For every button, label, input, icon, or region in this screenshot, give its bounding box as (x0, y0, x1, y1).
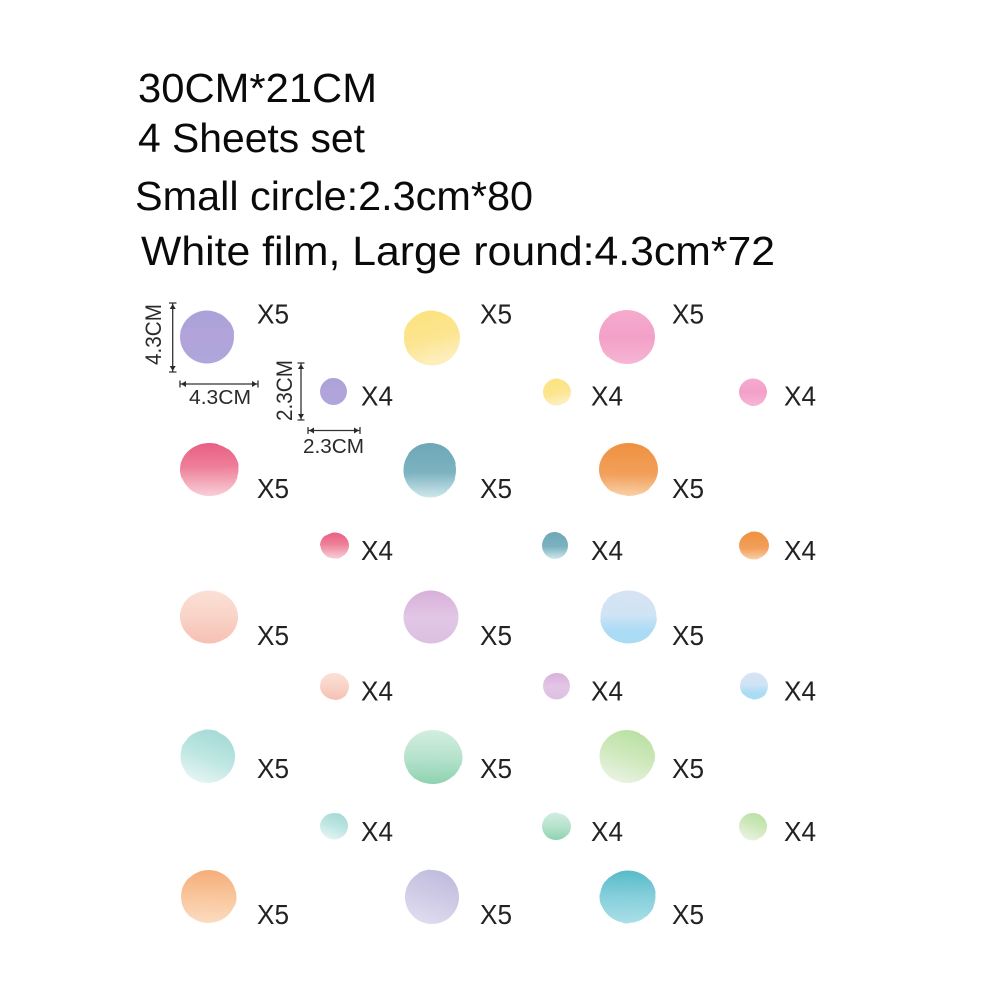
quantity labels X4: X4 (784, 380, 816, 412)
title text block (135, 65, 775, 274)
quantity labels X4: X4 (591, 535, 623, 566)
quantity labels X5: X5 (480, 753, 512, 784)
quantity labels X4: X4 (784, 676, 816, 706)
quantity labels X5: X5 (480, 899, 512, 930)
quantity labels X4: X4 (591, 380, 623, 412)
quantity labels X5: X5 (257, 298, 289, 330)
dimension: large circle 4.3CM: 4.3CM (189, 387, 251, 409)
quantity labels X5: X5 (257, 899, 289, 930)
quantity labels X5: X5 (257, 753, 289, 784)
quantity labels X4: X4 (361, 676, 393, 706)
quantity labels X5: X5 (480, 298, 512, 330)
quantity labels X4: X4 (784, 535, 816, 566)
quantity labels X5: X5 (672, 298, 704, 330)
dimension: large circle 4.3CM: 4.3CM (141, 304, 166, 365)
dimension: small circle 2.3CM: 2.3CM (303, 436, 364, 458)
quantity labels X5: X5 (257, 620, 289, 651)
quantity labels X5: X5 (480, 620, 512, 651)
title text block: 30CM*21CM (138, 65, 377, 111)
quantity labels X5: X5 (672, 899, 704, 930)
large dots (180, 310, 658, 924)
title text block: White film, Large round:4.3cm*72 (141, 228, 775, 274)
quantity labels X4: X4 (361, 535, 393, 566)
quantity labels X4: X4 (591, 676, 623, 706)
quantity labels X5: X5 (672, 753, 704, 784)
quantity labels X4: X4 (361, 380, 393, 412)
quantity labels X4 (361, 380, 816, 847)
quantity labels X4: X4 (784, 816, 816, 847)
dimension: large circle 4.3CM (141, 303, 258, 409)
quantity labels X4: X4 (591, 816, 623, 847)
dimension: small circle 2.3CM: 2.3CM (272, 360, 297, 421)
quantity labels X4: X4 (361, 816, 393, 847)
quantity labels X5: X5 (480, 473, 512, 504)
quantity labels X5 (257, 298, 704, 930)
quantity labels X5: X5 (257, 473, 289, 504)
dimension: small circle 2.3CM (272, 360, 364, 458)
quantity labels X5: X5 (672, 473, 704, 504)
title text block: Small circle:2.3cm*80 (135, 173, 533, 219)
quantity labels X5: X5 (672, 620, 704, 651)
small dots (320, 378, 769, 840)
title text block: 4 Sheets set (138, 115, 366, 161)
